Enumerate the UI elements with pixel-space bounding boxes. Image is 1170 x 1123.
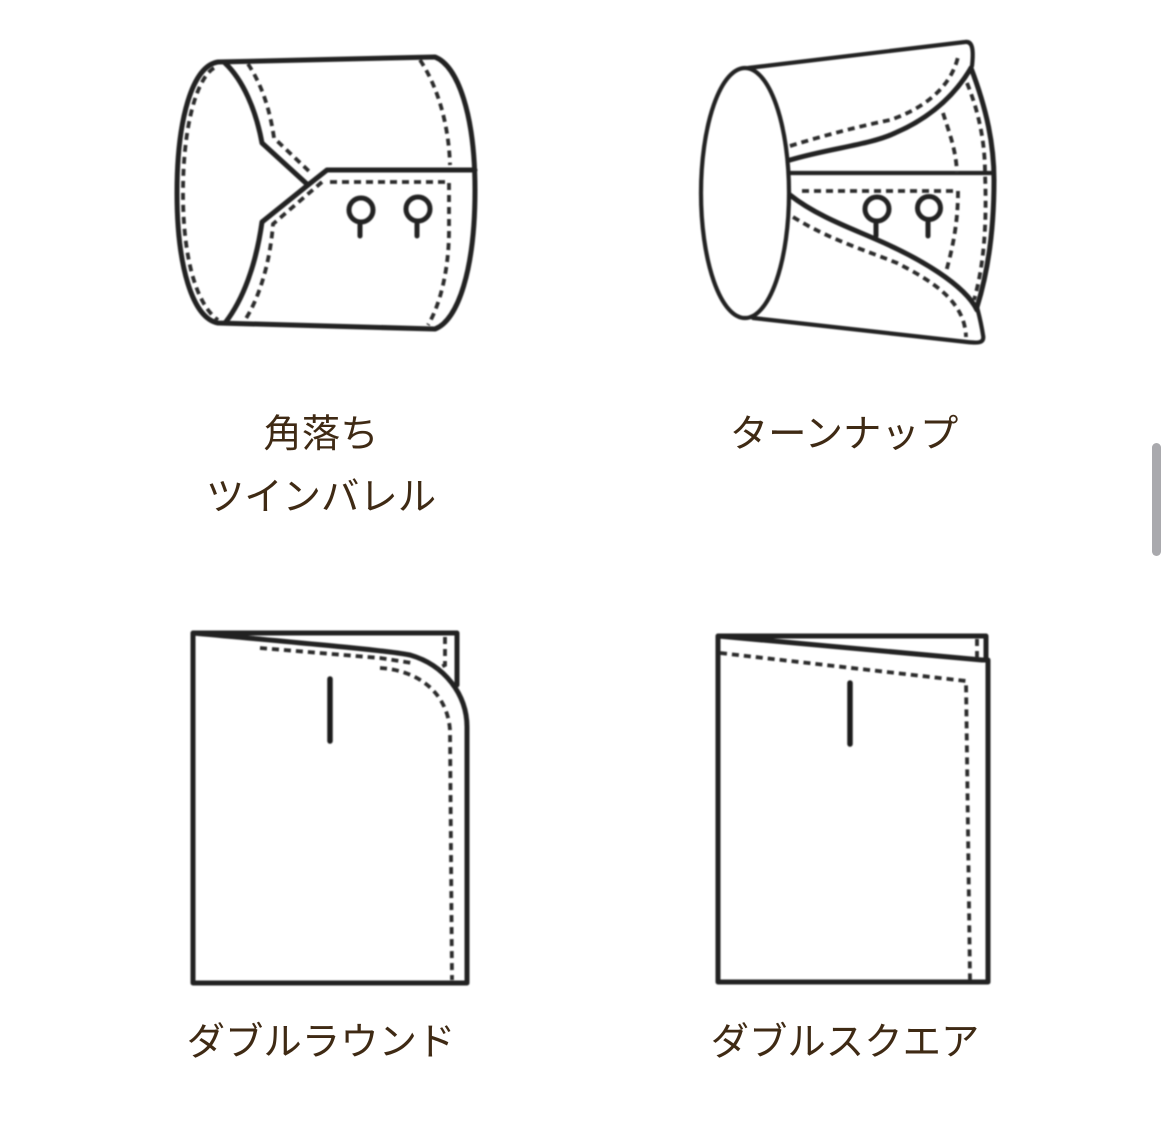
button slit [847,683,853,744]
stitching [183,68,218,320]
stitching [720,653,970,980]
cuff opening ellipse [701,68,789,318]
placket line [790,171,993,175]
label: angled twin barrel [206,413,436,519]
cuff outline [177,57,475,329]
label: angled twin barrel: 角落ち [263,413,379,456]
top and bottom edges [748,42,983,343]
stitching [260,648,412,663]
cuff opening edge [225,63,308,323]
stitching [790,57,958,146]
right edge [971,68,994,307]
buttons [865,197,889,221]
cuff illustration: angled twin barrel [177,57,475,329]
cuff illustration: turn-up [701,42,994,343]
scrollbar [1152,443,1161,556]
label: double square: ダブルスクエア [711,1021,979,1064]
label: turn-up: ターンナップ [730,413,958,456]
cuff outline [193,633,467,983]
buttons [349,198,373,222]
label: double round: ダブルラウンド [187,1021,455,1064]
cuff outline [718,636,988,982]
placket line [308,170,475,185]
lower flap [790,195,977,310]
cuff illustration: double round [193,633,467,983]
button slit [327,679,333,741]
upper flap [790,68,971,160]
label: angled twin barrel: ツインバレル [206,476,436,519]
cuff illustration: double square [718,636,988,982]
